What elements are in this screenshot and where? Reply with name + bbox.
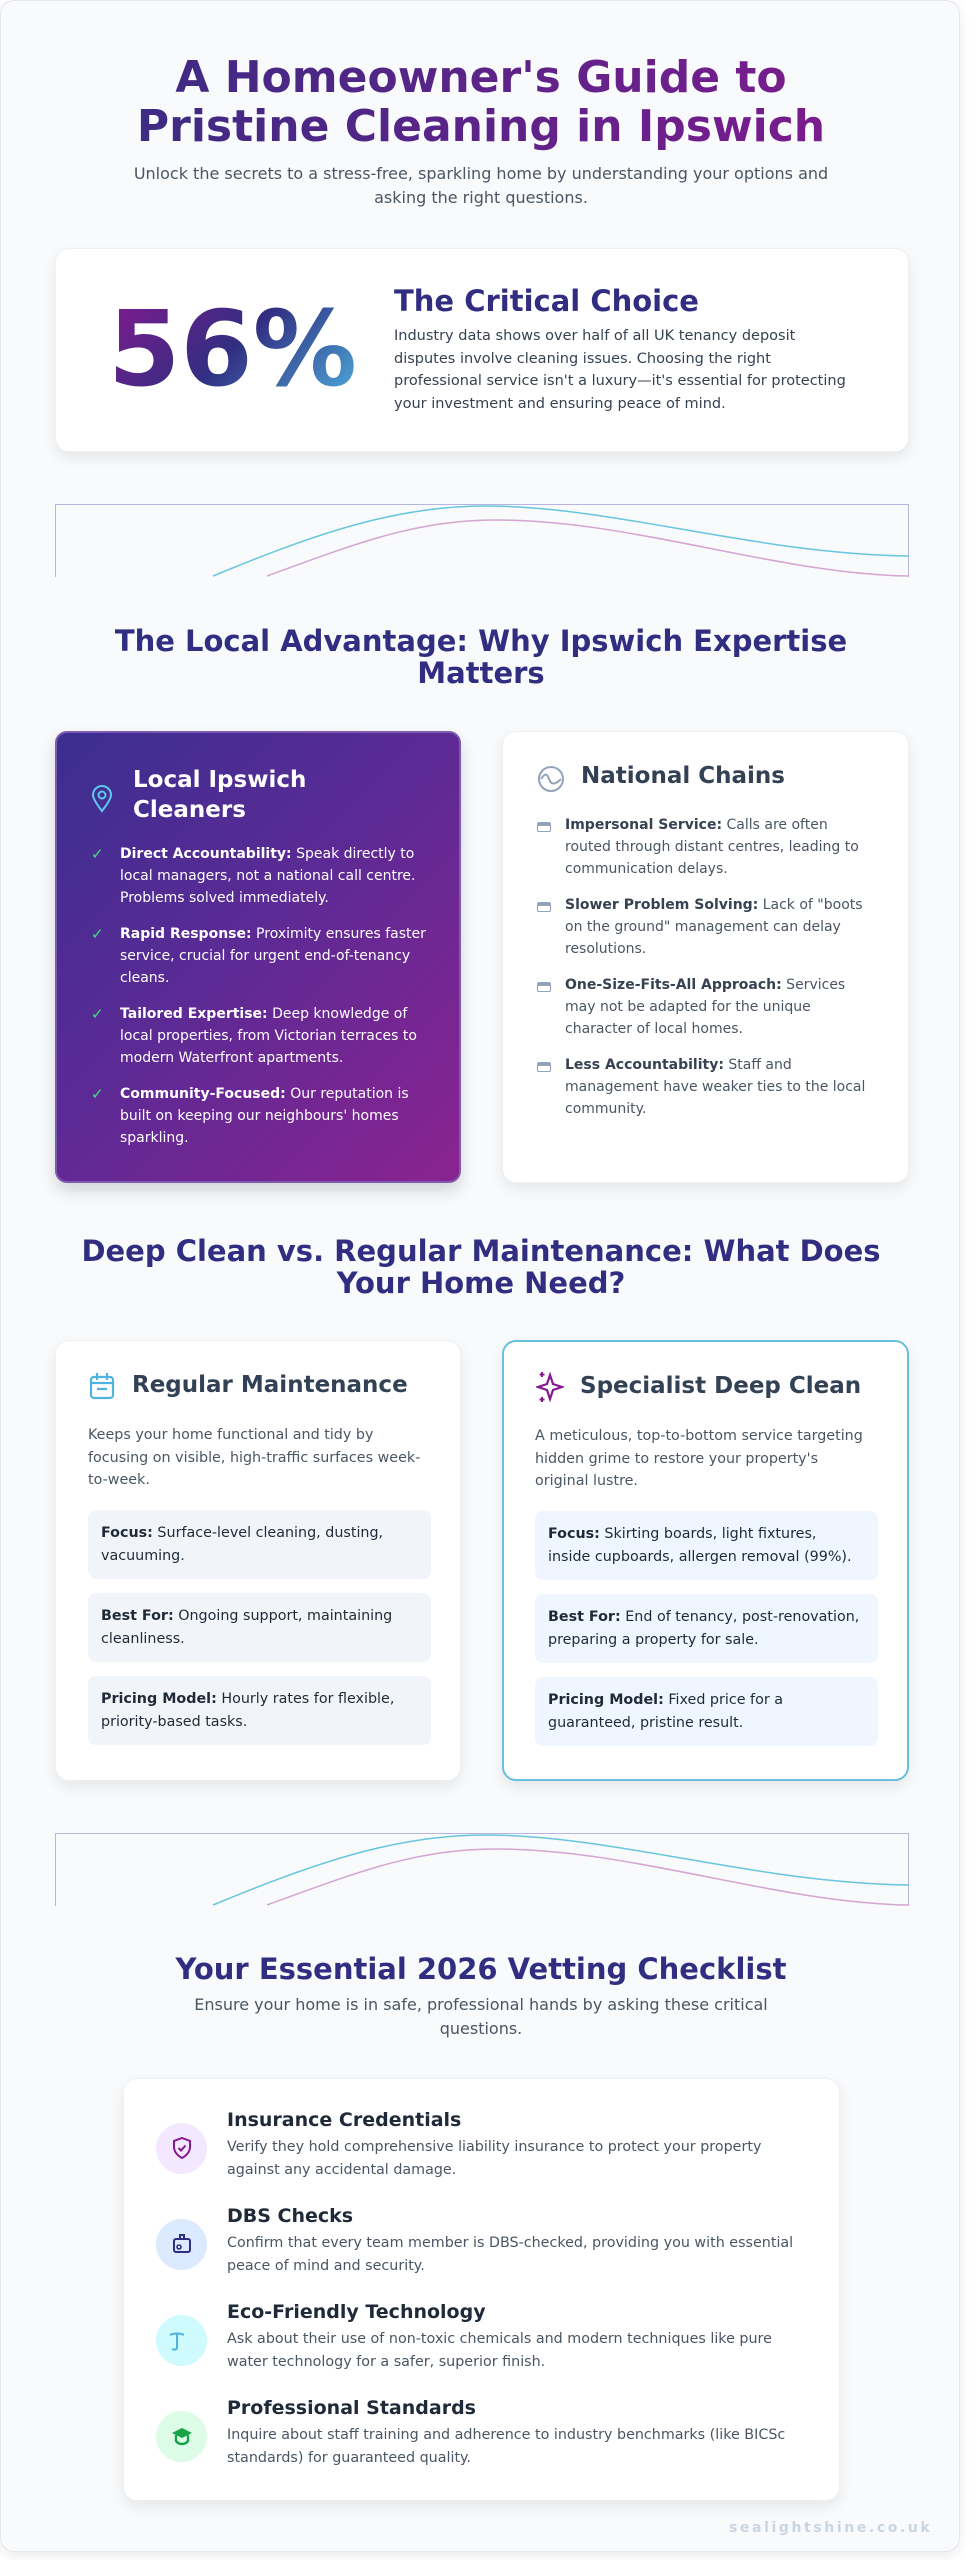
description: original lustre. bbox=[535, 1473, 638, 1489]
item: dbs: Confirm that every team member is DBS-checked, providing you with essential peace of mind and security. bbox=[227, 2235, 793, 2274]
item: eco: Ask about their use of non-toxic chemicals and modern techniques like pure water technology for a safer, superior finish. bbox=[227, 2331, 772, 2370]
section heading: local advantage: Matters bbox=[417, 656, 545, 690]
section heading: deep clean vs regular: Your Home Need? bbox=[337, 1266, 625, 1300]
item: dbs bbox=[156, 2205, 793, 2274]
description bbox=[535, 1428, 863, 1489]
item: insurance: Insurance Credentials bbox=[227, 2109, 461, 2131]
detail boxes: Best For: End of tenancy, post-renovation, preparing a property for sale. bbox=[548, 1609, 859, 1648]
description: A meticulous, top-to-bottom service targeting bbox=[535, 1428, 863, 1444]
item: standards: Inquire about staff training and adherence to industry benchmarks (like BICSc standards) for guaranteed quality. bbox=[227, 2427, 785, 2466]
wave divider bbox=[55, 504, 909, 577]
list: Direct Accountability: Speak directly to local managers, not a national call centre. Problems solved immediately. bbox=[120, 846, 415, 906]
list: ✓ bbox=[91, 1005, 104, 1023]
icon: sparkles bbox=[536, 1372, 564, 1402]
section heading: local advantage bbox=[115, 624, 847, 690]
section heading: local advantage: The Local Advantage: Why Ipswich Expertise bbox=[115, 624, 847, 658]
heading: National Chains bbox=[581, 763, 785, 789]
detail boxes: Focus: Skirting boards, light fixtures, bbox=[548, 1526, 816, 1542]
title: A Homeowner's Guide to bbox=[175, 52, 787, 103]
checklist subtitle: Ensure your home is in safe, professional hands by asking these critical questions. bbox=[194, 1995, 768, 2038]
stat text: Industry data shows over half of all UK tenancy deposit disputes involve cleaning issues. Choosing the right professional service isn't a luxury—it's essential for protecting your investment and ensuring peace of mind. bbox=[394, 328, 846, 412]
panel: regular maintenance bbox=[55, 1340, 461, 1781]
panel: checklist bbox=[123, 2078, 840, 2501]
description: Keeps your home functional and tidy by focusing on visible, high-traffic surfaces week-to-week. bbox=[88, 1427, 420, 1488]
footer brand: sealightshine.co.uk bbox=[729, 2520, 932, 2536]
heading bbox=[133, 767, 306, 823]
heading: Local Ipswich bbox=[133, 767, 306, 793]
detail boxes: Best For: Ongoing support, maintaining cleanliness. bbox=[101, 1608, 392, 1646]
detail boxes: Pricing Model: Hourly rates for flexible, priority-based tasks. bbox=[101, 1691, 394, 1730]
item: standards: Professional Standards bbox=[227, 2397, 476, 2419]
panel: local cleaners bbox=[55, 731, 461, 1183]
heading: Specialist Deep Clean bbox=[580, 1373, 861, 1399]
list: Slower Problem Solving: Lack of "boots on the ground" management can delay resolutions. bbox=[565, 897, 863, 957]
detail boxes bbox=[88, 1510, 431, 1745]
stat number: 56% bbox=[108, 288, 357, 410]
item: standards bbox=[156, 2397, 785, 2466]
title: Pristine Cleaning in Ipswich bbox=[137, 101, 825, 152]
title bbox=[1, 53, 961, 151]
list bbox=[91, 845, 426, 1146]
icon: shield bbox=[156, 2123, 207, 2174]
section heading: deep clean vs regular bbox=[81, 1234, 881, 1300]
list: Impersonal Service: Calls are often routed through distant centres, leading to communication delays. bbox=[565, 817, 859, 877]
list: ✓ bbox=[91, 1085, 104, 1103]
detail boxes: inside cupboards, allergen removal (99%). bbox=[548, 1548, 852, 1564]
icon: id badge bbox=[156, 2219, 207, 2270]
icon: calendar bbox=[90, 1373, 114, 1400]
item: dbs: DBS Checks bbox=[227, 2205, 353, 2227]
list: Community-Focused: Our reputation is built on keeping our neighbours' homes sparkling. bbox=[120, 1086, 409, 1146]
icon: chain bbox=[538, 766, 564, 792]
section heading: deep clean vs regular: Deep Clean vs. Regular Maintenance: What Does bbox=[81, 1234, 881, 1268]
item: insurance bbox=[156, 2109, 761, 2178]
item: eco bbox=[156, 2301, 772, 2370]
detail boxes bbox=[535, 1511, 878, 1746]
stat heading: The Critical Choice bbox=[394, 284, 699, 318]
subtitle: Unlock the secrets to a stress-free, sparkling home by understanding your options and asking the right questions. bbox=[134, 164, 828, 207]
list: Tailored Expertise: Deep knowledge of local properties, from Victorian terraces to modern Waterfront apartments. bbox=[120, 1006, 417, 1066]
wave divider 2 bbox=[55, 1833, 909, 1906]
icon: graduation cap bbox=[156, 2411, 207, 2462]
item: eco: Eco-Friendly Technology bbox=[227, 2301, 486, 2323]
list bbox=[537, 817, 865, 1117]
stat card bbox=[55, 248, 909, 452]
list: ✓ bbox=[91, 845, 104, 863]
icon: map pin bbox=[92, 785, 112, 812]
detail boxes: Pricing Model: Fixed price for a guaranteed, pristine result. bbox=[548, 1692, 783, 1730]
description: hidden grime to restore your property's bbox=[535, 1450, 818, 1466]
list: One-Size-Fits-All Approach: Services may not be adapted for the unique character of local homes. bbox=[565, 977, 845, 1037]
detail boxes: Focus: Surface-level cleaning, dusting, vacuuming. bbox=[101, 1525, 383, 1564]
section heading: checklist: Your Essential 2026 Vetting Checklist bbox=[176, 1952, 786, 1986]
icon: tap bbox=[156, 2315, 207, 2366]
list: ✓ bbox=[91, 925, 104, 943]
item: insurance: Verify they hold comprehensive liability insurance to protect your property against any accidental damage. bbox=[227, 2139, 761, 2178]
panel: national chains bbox=[502, 731, 909, 1183]
list: Rapid Response: Proximity ensures faster service, crucial for urgent end-of-tenancy cleans. bbox=[120, 926, 426, 986]
heading: Cleaners bbox=[133, 797, 246, 823]
heading: Regular Maintenance bbox=[132, 1372, 408, 1398]
panel: specialist deep clean bbox=[502, 1340, 909, 1781]
list: Less Accountability: Staff and management have weaker ties to the local community. bbox=[565, 1057, 865, 1117]
